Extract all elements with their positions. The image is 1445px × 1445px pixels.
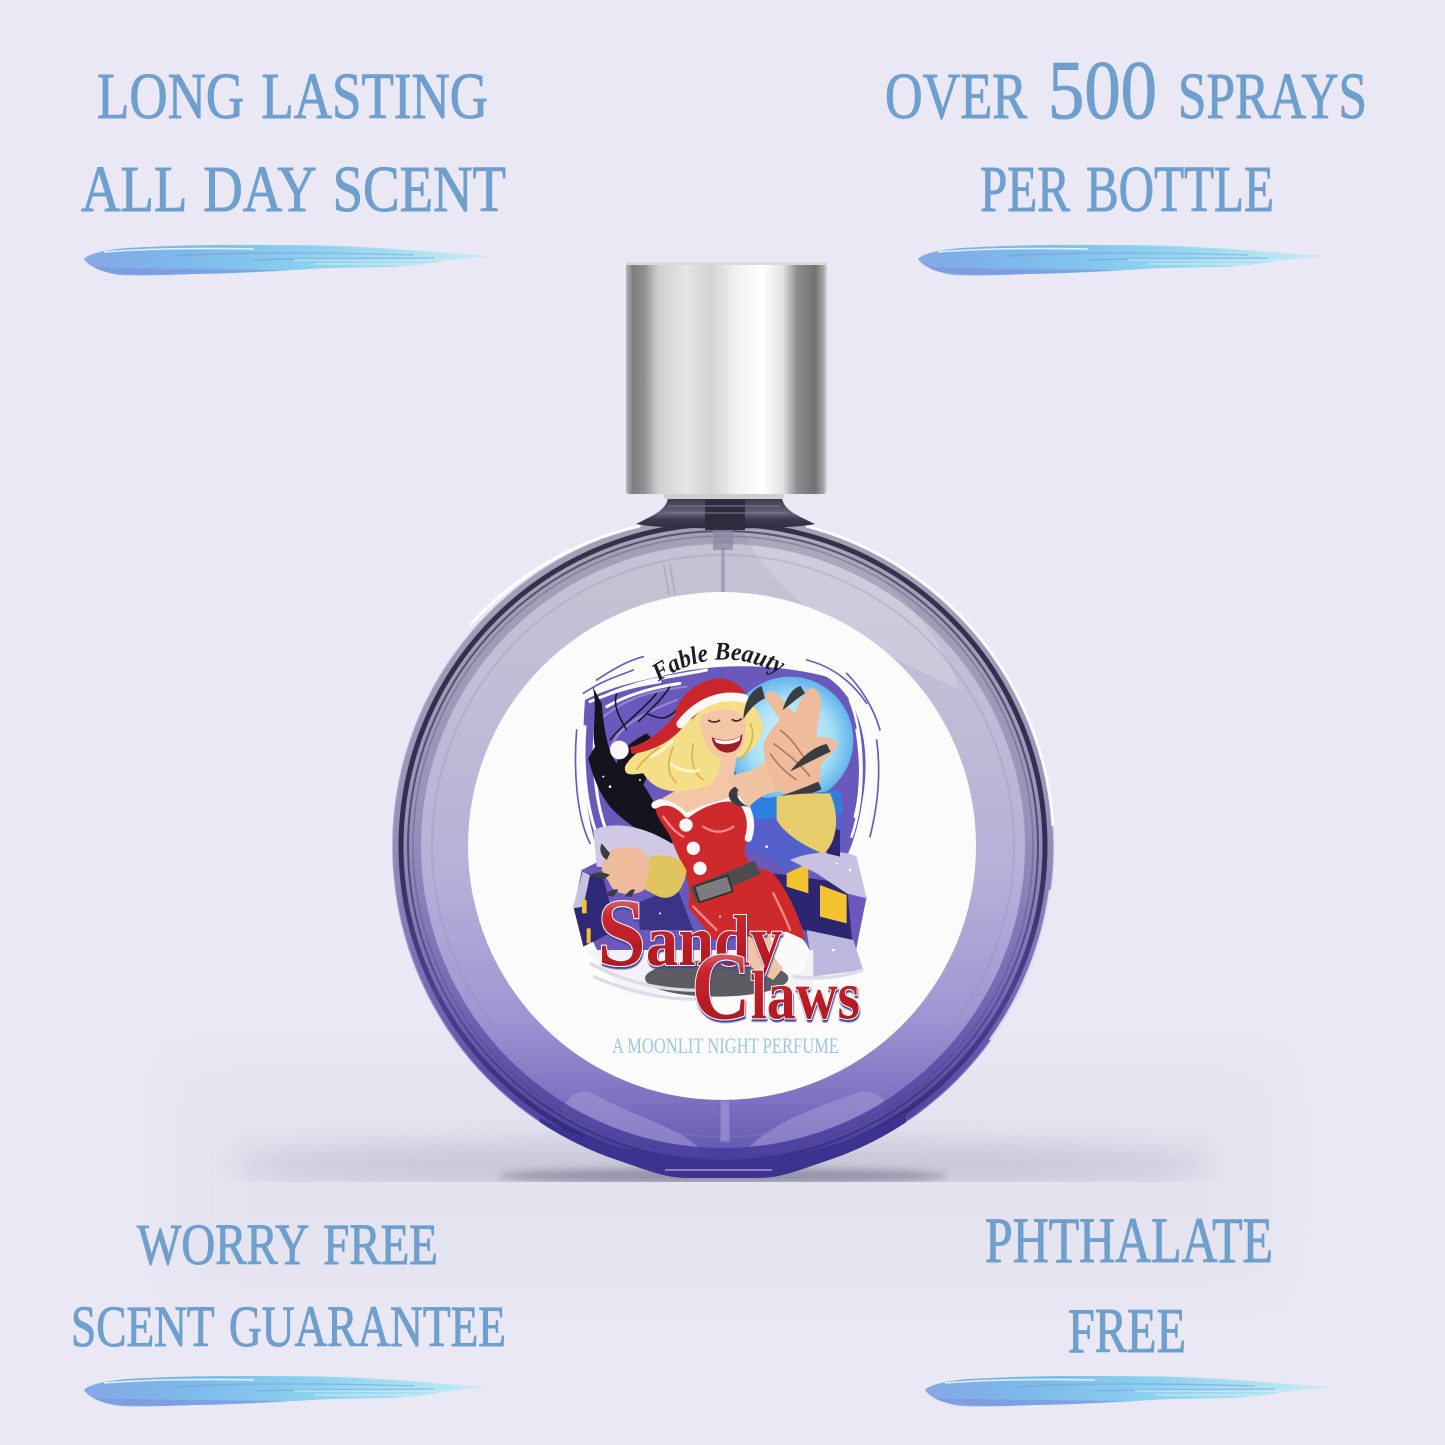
text block: worry free scent guarantee: SCENT GUARANTEE [71,1294,506,1359]
left clawed hand [590,843,649,897]
text block: over 500 sprays per bottle: 500 [1048,44,1157,137]
glass body [392,515,1054,1190]
brand text: Fable Beauty [652,642,784,682]
text block: phthalate free: FREE [1068,1296,1186,1366]
round label [468,592,976,1100]
dress [655,797,805,940]
label tagline: A MOONLIT NIGHT PERFUME [612,1033,839,1058]
spray tube [664,528,733,1142]
brush stroke: bottom left [84,1376,492,1406]
fur cuff right [777,793,836,854]
big clawed hand [729,686,837,807]
text block: worry free scent guarantee [71,1212,506,1359]
product name: Claws: Claws [692,932,860,1039]
pompom buttons [679,818,707,875]
santa hat [610,678,747,759]
brush stroke: bottom right [925,1376,1333,1406]
left fur arm [640,855,687,898]
cap [626,262,827,499]
product name: Sandy: Sandy [597,879,782,986]
text block: over 500 sprays per bottle: SPRAYS [1178,60,1367,133]
brush stroke: top left [84,245,492,275]
moon [727,677,853,803]
label illustration [572,642,881,1039]
hair [625,690,763,791]
chest and neck [660,757,737,813]
text block: over 500 sprays per bottle: OVER [885,60,1027,133]
snowy hills and houses [573,825,867,977]
belt [690,861,760,903]
dress shine [663,817,790,930]
text block: over 500 sprays per bottle: PER BOTTLE [980,153,1274,226]
face [700,709,746,759]
blue sky glow [747,790,843,870]
fur skirt hem [770,930,809,974]
fur neckline [655,798,751,838]
text block: phthalate free: PHTHALATE [985,1205,1273,1277]
text block: worry free scent guarantee: WORRY FREE [137,1212,438,1277]
floor shadow behind bottle [227,1124,1219,1182]
snowflakes [602,776,851,951]
text block: over 500 sprays per bottle [885,44,1367,226]
purple night sky [575,666,867,963]
raised arm [727,758,782,808]
brush stroke: top right [918,245,1326,275]
sled and snow swirl [587,950,863,999]
text block: phthalate free [985,1205,1273,1366]
perfume bottle [392,262,1054,1178]
bare tree [588,687,677,845]
text block: long lasting all day scent [81,60,506,226]
swirling snow streaks [575,657,880,850]
neck [636,498,815,530]
text block: long lasting all day scent: ALL DAY SCENT [81,153,506,226]
leg [737,933,787,980]
text block: long lasting all day scent: LONG LASTING [97,60,488,133]
